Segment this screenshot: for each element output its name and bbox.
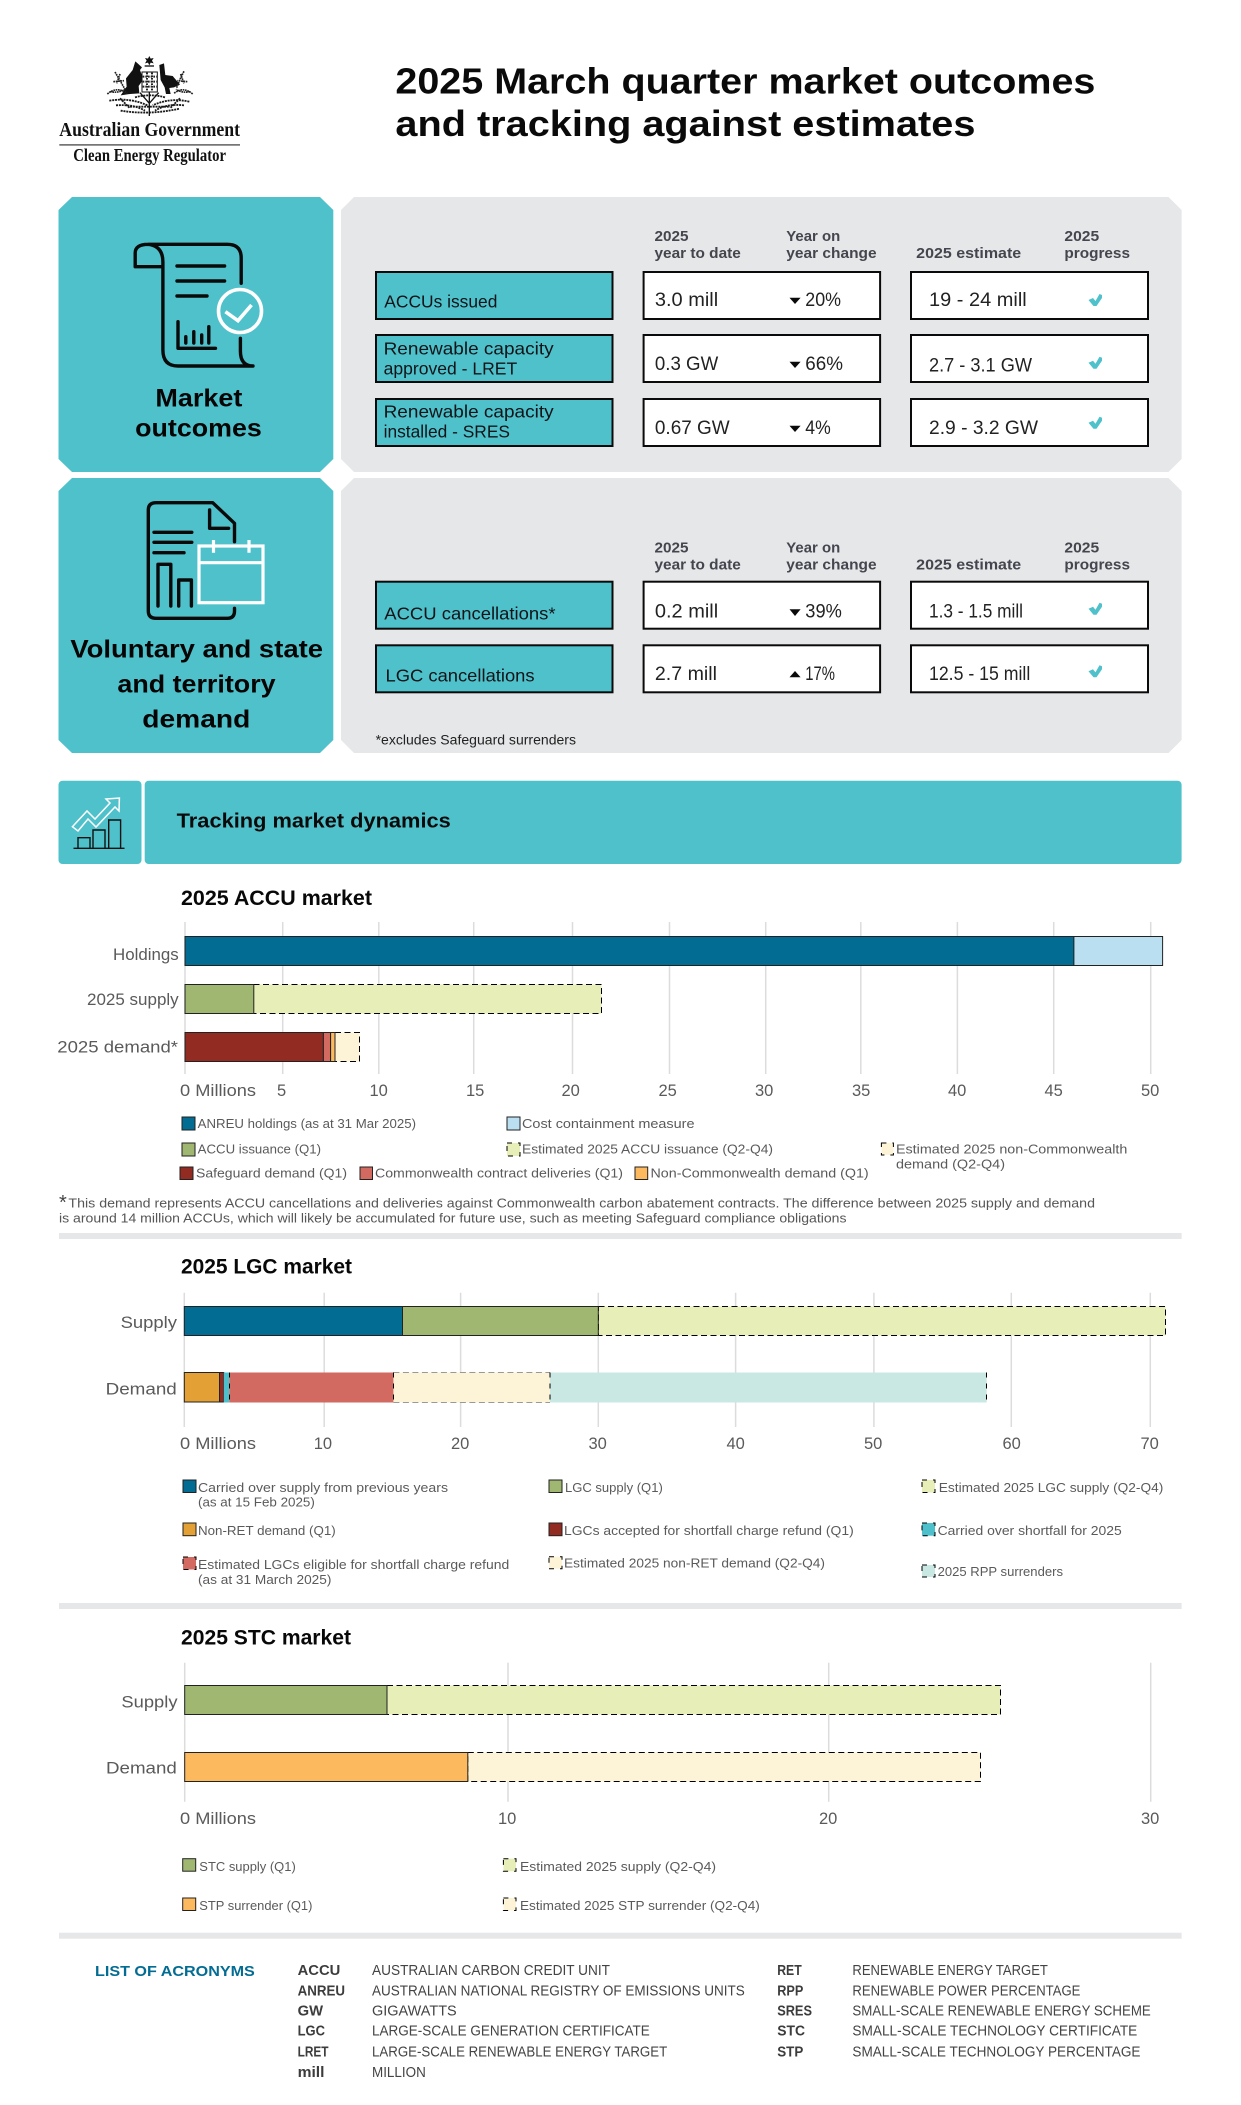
axis labels: 0 Millions	[180, 1435, 256, 1453]
acronyms column 1: LRET	[298, 2044, 329, 2060]
axis labels: 30	[588, 1435, 607, 1453]
panel: market outcomes heading	[58, 197, 333, 472]
legend: Non-RET demand (Q1)	[198, 1523, 336, 1538]
axis labels: 50	[1141, 1082, 1159, 1100]
axis labels: 0 Millions	[180, 1082, 256, 1100]
legend: 2025 RPP surrenders	[938, 1564, 1063, 1579]
column headers: 2025	[1064, 539, 1099, 556]
acronyms column 2: SRES	[777, 2004, 812, 2020]
axis labels: 70	[1140, 1435, 1159, 1453]
legend	[180, 1116, 1127, 1180]
axis labels: 50	[864, 1435, 882, 1453]
legend: ACCU issuance (Q1)	[198, 1142, 321, 1156]
acronyms column 2: RPP	[777, 1984, 804, 2000]
axis labels: 20	[819, 1810, 837, 1828]
category labels: Demand	[106, 1380, 177, 1398]
category labels: 2025 demand*	[57, 1038, 179, 1056]
row: ACCUs issued: 19 - 24 mill	[929, 290, 1027, 311]
heading: voluntary and state and territory demand: and territory	[117, 671, 276, 699]
row: Renewable capacity approved - LRET: 66%	[805, 354, 843, 375]
legend: Estimated 2025 supply (Q2-Q4)	[520, 1859, 716, 1874]
column headers	[654, 228, 1130, 262]
bar: 2025 supply	[185, 984, 602, 1014]
legend: LGCs accepted for shortfall charge refund (Q1)	[564, 1523, 854, 1538]
column headers: year change	[786, 245, 877, 262]
heading: voluntary and state and territory demand	[70, 636, 323, 733]
row: LGC cancellations: LGC cancellations	[386, 665, 535, 685]
acronyms column 1: ANREU	[298, 1984, 345, 2000]
icon: report scroll with check	[135, 244, 262, 366]
footnote	[59, 1192, 1095, 1226]
acronyms column 1: GIGAWATTS	[372, 2004, 457, 2020]
acronyms column 1: AUSTRALIAN CARBON CREDIT UNIT	[372, 1963, 610, 1979]
acronyms column 1: ACCU	[298, 1963, 340, 1979]
heading: voluntary and state and territory demand: Voluntary and state	[70, 636, 323, 664]
acronyms column 2: RENEWABLE POWER PERCENTAGE	[852, 1984, 1081, 2000]
legend: Estimated 2025 non-RET demand (Q2-Q4)	[564, 1556, 825, 1570]
row: ACCUs issued: 3.0 mill	[655, 290, 718, 311]
column headers: year change	[786, 556, 877, 574]
bar: supply	[185, 1686, 1000, 1714]
column headers: 2025	[1064, 228, 1099, 245]
acronyms column 1: MILLION	[372, 2065, 426, 2081]
column headers: 2025	[654, 228, 688, 245]
legend: (as at 15 Feb 2025)	[198, 1494, 315, 1510]
legend: Estimated 2025 non-Commonwealth	[896, 1142, 1127, 1156]
column headers: progress	[1064, 556, 1130, 574]
row: Renewable capacity installed - SRES: Renewable capacity	[384, 402, 554, 422]
bar: demand	[185, 1752, 980, 1782]
row: ACCU cancellations: 0.2 mill	[655, 602, 718, 623]
acronyms column 2	[777, 1963, 1151, 2060]
acronyms column 2: SMALL-SCALE RENEWABLE ENERGY SCHEME	[852, 2004, 1151, 2020]
row: LGC cancellations: 12.5 - 15 mill	[929, 664, 1030, 685]
icon: document with calendar	[148, 503, 263, 618]
bar: supply	[184, 1306, 1166, 1336]
bar: holdings	[185, 936, 1163, 966]
legend: Estimated 2025 LGC supply (Q2-Q4)	[939, 1480, 1163, 1495]
row: Renewable capacity approved - LRET: 2.7 - 3.1 GW	[929, 355, 1032, 376]
panel: voluntary demand table	[341, 478, 1182, 753]
heading: tracking market dynamics: Tracking market dynamics	[177, 811, 451, 833]
chart: 2025 STC market	[106, 1626, 1159, 1913]
acronyms column 1: LGC	[298, 2024, 325, 2040]
legend: Safeguard demand (Q1)	[196, 1166, 347, 1180]
legend: Commonwealth contract deliveries (Q1)	[375, 1166, 623, 1180]
heading: voluntary and state and territory demand: demand	[142, 705, 250, 733]
bar: 2025 demand	[185, 1032, 360, 1062]
axis labels	[180, 1082, 1159, 1100]
legend: Estimated 2025 STP surrender (Q2-Q4)	[520, 1898, 760, 1913]
legend: (as at 31 March 2025)	[198, 1572, 331, 1587]
axis labels: 25	[658, 1082, 677, 1100]
axis labels: 5	[277, 1082, 286, 1100]
row: Renewable capacity installed - SRES	[376, 399, 1148, 446]
row: Renewable capacity approved - LRET: 0.3 GW	[655, 354, 718, 375]
acronyms column 1: LARGE-SCALE GENERATION CERTIFICATE	[372, 2024, 650, 2040]
axis labels: 0 Millions	[180, 1810, 256, 1828]
column headers: year to date	[654, 556, 741, 574]
legend	[183, 1859, 760, 1913]
row: ACCU cancellations: 39%	[805, 602, 842, 623]
category labels: 2025 supply	[87, 991, 179, 1009]
legend: Carried over supply from previous years	[198, 1480, 449, 1495]
row: ACCUs issued	[376, 272, 1148, 319]
title: 2025 March quarter market outcomes	[395, 60, 1095, 102]
row: Renewable capacity installed - SRES: 4%	[805, 418, 831, 439]
legend: Cost containment measure	[522, 1116, 694, 1131]
row: ACCUs issued: 20%	[805, 290, 841, 311]
heading: market outcomes: outcomes	[135, 415, 262, 443]
column headers: 2025 estimate	[916, 556, 1021, 574]
column headers: Year on	[786, 228, 840, 245]
legend: Non-Commonwealth demand (Q1)	[650, 1166, 869, 1180]
acronyms column 1: mill	[298, 2065, 324, 2081]
heading: 2025 LGC market	[181, 1256, 352, 1278]
acronyms column 2: SMALL-SCALE TECHNOLOGY CERTIFICATE	[852, 2024, 1138, 2040]
footnote: excludes safeguard surrenders: *excludes Safeguard surrenders	[376, 732, 576, 747]
axis labels	[180, 1435, 1159, 1453]
row: LGC cancellations: 17%	[805, 664, 835, 685]
column headers: year to date	[654, 245, 741, 262]
acronyms column 1: AUSTRALIAN NATIONAL REGISTRY OF EMISSIONS UNITS	[372, 1984, 745, 2000]
acronyms column 2: STP	[777, 2044, 804, 2060]
row: Renewable capacity installed - SRES: 2.9 - 3.2 GW	[929, 418, 1038, 439]
category labels: Supply	[121, 1314, 178, 1332]
legend: STP surrender (Q1)	[199, 1898, 312, 1913]
axis labels: 20	[562, 1082, 580, 1100]
heading: 2025 STC market	[181, 1626, 351, 1649]
chart: 2025 ACCU market	[57, 887, 1163, 1226]
column headers: Year on	[786, 539, 840, 556]
text: Australian Government: Australian Government	[59, 119, 240, 141]
acronyms column 1: GW	[298, 2004, 323, 2020]
list of acronyms	[95, 1963, 1151, 2081]
axis labels: 20	[451, 1435, 469, 1453]
text: Clean Energy Regulator: Clean Energy Regulator	[73, 145, 226, 165]
icon: growth chart	[58, 781, 142, 864]
panel: market outcomes table	[341, 197, 1182, 472]
legend	[183, 1480, 1163, 1587]
acronyms column 2: RENEWABLE ENERGY TARGET	[852, 1963, 1048, 1979]
legend: ANREU holdings (as at 31 Mar 2025)	[198, 1116, 416, 1131]
row: ACCU cancellations: ACCU cancellations*	[384, 603, 556, 623]
category labels	[106, 1693, 178, 1777]
column headers	[654, 539, 1130, 574]
row: Renewable capacity approved - LRET: approved - LRET	[384, 358, 518, 378]
banner: tracking market dynamics	[58, 781, 1182, 864]
column headers: 2025 estimate	[916, 245, 1021, 262]
heading: 2025 ACCU market	[181, 887, 372, 910]
category labels	[57, 946, 179, 1056]
row: LGC cancellations	[376, 645, 1148, 692]
footnote: *	[59, 1192, 67, 1214]
axis labels: 30	[755, 1082, 773, 1100]
legend: Estimated 2025 ACCU issuance (Q2-Q4)	[522, 1142, 773, 1156]
legend: STC supply (Q1)	[199, 1859, 296, 1874]
column headers: 2025	[654, 539, 688, 556]
row: ACCU cancellations: 1.3 - 1.5 mill	[929, 602, 1023, 623]
acronyms column 2: STC	[777, 2024, 806, 2040]
category labels: Supply	[121, 1693, 178, 1711]
row: Renewable capacity installed - SRES: installed - SRES	[384, 421, 510, 441]
acronyms column 2: SMALL-SCALE TECHNOLOGY PERCENTAGE	[852, 2044, 1141, 2060]
acronyms column 1: LARGE-SCALE RENEWABLE ENERGY TARGET	[372, 2044, 667, 2060]
row: ACCUs issued: ACCUs issued	[384, 291, 497, 311]
axis labels: 10	[498, 1810, 516, 1828]
footnote: is around 14 million ACCUs, which will likely be accumulated for future use, such as meeting Safeguard compliance obligations	[59, 1211, 847, 1226]
row: Renewable capacity approved - LRET	[376, 335, 1148, 382]
row: Renewable capacity approved - LRET: Renewable capacity	[384, 338, 554, 358]
axis labels: 60	[1002, 1435, 1021, 1453]
row: Renewable capacity installed - SRES: 0.67 GW	[655, 418, 730, 439]
title: and tracking against estimates	[395, 103, 975, 144]
title	[395, 60, 1095, 144]
logo: Australian Government Clean Energy Regulator	[59, 56, 240, 165]
category labels: Demand	[106, 1759, 177, 1777]
axis labels: 45	[1044, 1082, 1063, 1100]
bar: demand	[184, 1372, 987, 1402]
footnote: This demand represents ACCU cancellations and deliveries against Commonwealth carbon abatement contracts. The difference between 2025 supply and demand	[68, 1196, 1095, 1211]
legend: demand (Q2-Q4)	[896, 1156, 1005, 1172]
axis labels: 35	[852, 1082, 870, 1100]
heading: market outcomes	[135, 385, 262, 443]
column headers: progress	[1064, 245, 1130, 262]
panel: voluntary and state and territory demand heading	[58, 478, 333, 753]
category labels: Holdings	[113, 946, 179, 964]
legend: Estimated LGCs eligible for shortfall charge refund	[198, 1557, 509, 1572]
legend: Carried over shortfall for 2025	[938, 1523, 1122, 1538]
axis labels: 10	[314, 1435, 332, 1453]
axis labels	[180, 1810, 1159, 1828]
row: LGC cancellations: 2.7 mill	[655, 664, 717, 685]
axis labels: 40	[726, 1435, 745, 1453]
heading: list of acronyms: LIST OF ACRONYMS	[95, 1963, 255, 1980]
axis labels: 40	[948, 1082, 966, 1100]
chart: 2025 LGC market	[106, 1256, 1166, 1587]
acronyms column 1	[298, 1963, 745, 2081]
heading: market outcomes: Market	[155, 385, 243, 413]
axis labels: 10	[370, 1082, 388, 1100]
axis labels: 30	[1141, 1810, 1159, 1828]
icon: coat of arms	[107, 56, 193, 116]
legend: LGC supply (Q1)	[565, 1480, 663, 1495]
category labels	[106, 1314, 178, 1398]
axis labels: 15	[466, 1082, 484, 1100]
acronyms column 2: RET	[777, 1963, 802, 1979]
row: ACCU cancellations	[376, 582, 1148, 629]
